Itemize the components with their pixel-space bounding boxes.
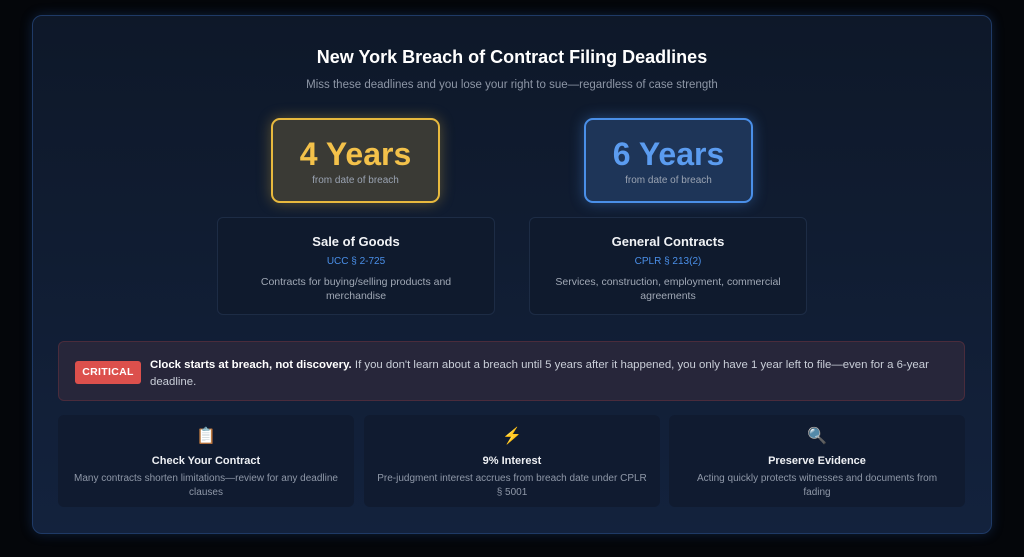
card: interest <box>364 415 660 507</box>
card: check contract: Many contracts shorten limitations—review for any deadline clauses <box>74 473 338 498</box>
card: evidence: Acting quickly protects witnesses and documents from fading <box>697 473 937 498</box>
subtitle: Miss these deadlines and you lose your right to sue—regardless of case strength <box>306 79 718 91</box>
card: general contracts: CPLR § 213(2) <box>635 256 701 267</box>
box: 4 years <box>271 118 440 203</box>
box: 4 years: 4 Years <box>300 136 411 172</box>
card: sale of goods <box>217 217 495 315</box>
card: evidence: 🔍 <box>807 428 827 445</box>
card: check contract: Check Your Contract <box>152 455 260 467</box>
box: 6 years: 6 Years <box>613 136 724 172</box>
card: check contract: 📋 <box>196 428 216 445</box>
card: check contract <box>58 415 354 507</box>
card: general contracts: General Contracts <box>612 234 724 249</box>
callout text: Clock starts at breach, not discovery. If you don't learn about a breach until 5 years after it happened, you only have 1 year left to file—even for a 6-year deadline. <box>150 359 929 388</box>
badge: critical: CRITICAL <box>82 366 134 378</box>
box: 4 years: from date of breach <box>312 175 399 186</box>
card: evidence: Preserve Evidence <box>768 455 866 467</box>
badge: critical <box>75 361 141 384</box>
card: interest: Pre-judgment interest accrues from breach date under CPLR § 5001 <box>377 473 647 498</box>
card: general contracts: Services, construction, employment, commercial agreements <box>555 276 781 302</box>
card: interest: ⚡ <box>502 428 522 445</box>
card: interest: 9% Interest <box>483 455 541 467</box>
box: 6 years: from date of breach <box>625 175 712 186</box>
card: sale of goods: Sale of Goods <box>312 234 400 249</box>
card: sale of goods: Contracts for buying/selling products and merchandise <box>261 276 451 302</box>
callout: critical <box>58 341 965 401</box>
card: general contracts <box>529 217 807 315</box>
title: New York Breach of Contract Filing Deadlines <box>317 47 707 67</box>
box: 6 years <box>584 118 753 203</box>
card: evidence <box>669 415 965 507</box>
card: sale of goods: UCC § 2-725 <box>327 256 385 267</box>
